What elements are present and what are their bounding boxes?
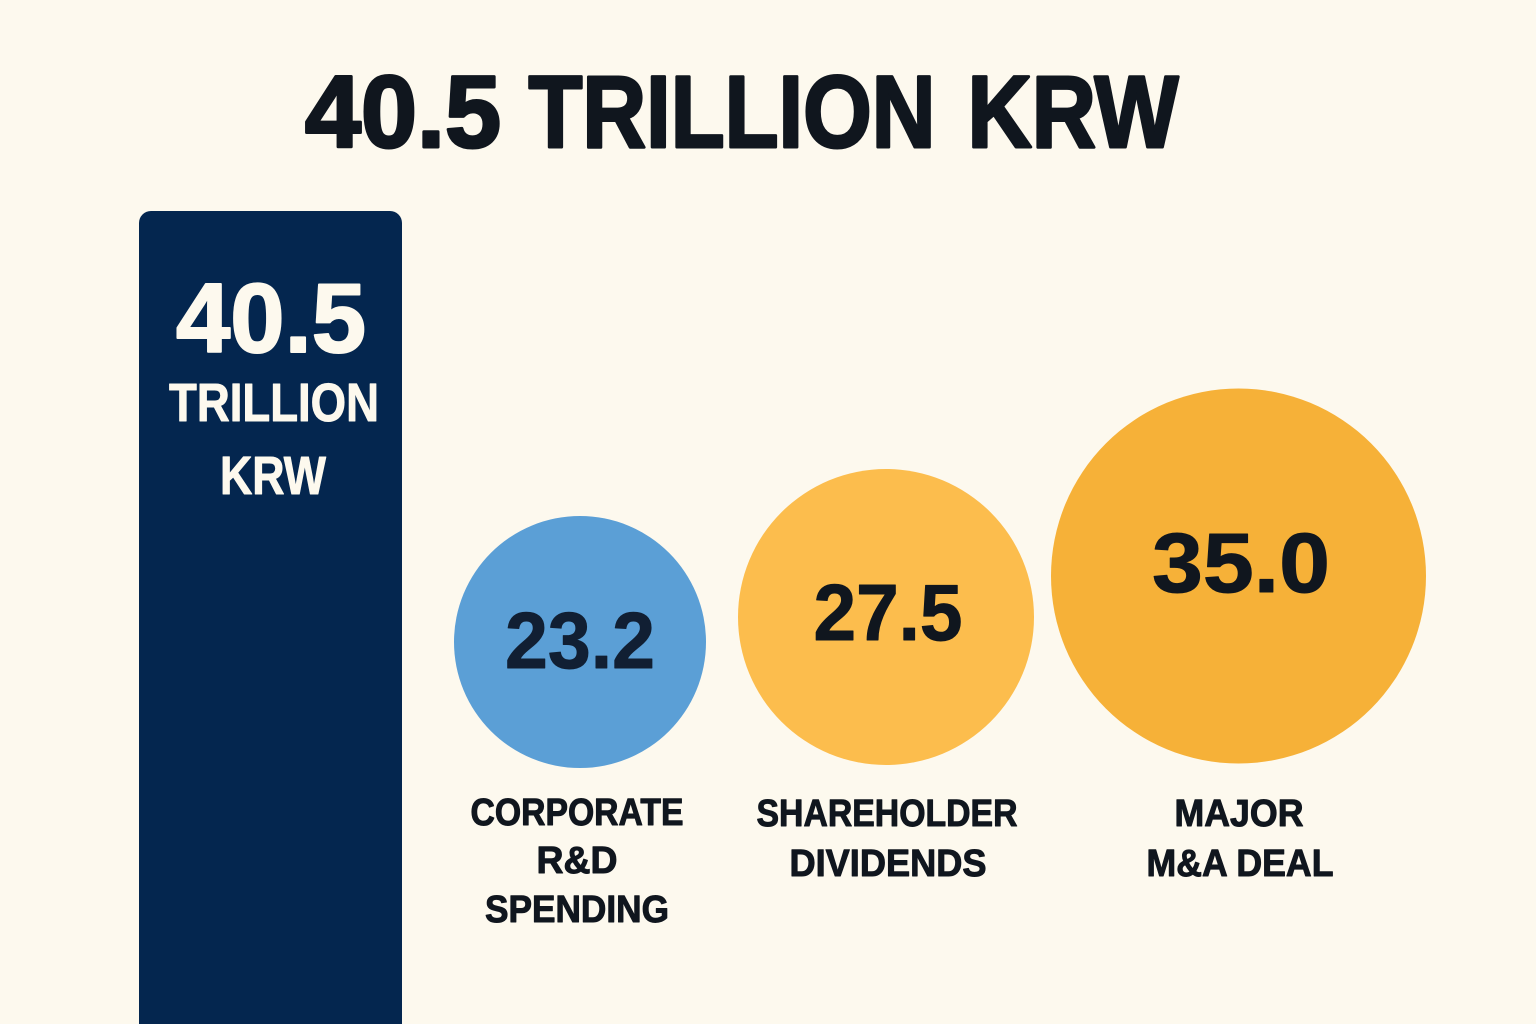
label: shareholder dividends: SHAREHOLDER	[756, 793, 1018, 835]
label: corporate R&D spending: CORPORATE	[470, 792, 684, 834]
label: major M&A deal	[1146, 793, 1334, 885]
bar unit line 1: TRILLION	[169, 373, 379, 433]
title	[305, 55, 1179, 169]
label: shareholder dividends: DIVIDENDS	[790, 843, 986, 885]
label: shareholder dividends	[756, 793, 1018, 885]
title: KRW	[968, 55, 1179, 169]
label: corporate R&D spending	[470, 792, 684, 931]
bar unit line 2: KRW	[220, 446, 326, 506]
label: major M&A deal: M&A DEAL	[1146, 843, 1334, 885]
label: corporate R&D spending: R&D	[536, 840, 618, 882]
bubble: shareholder dividends	[738, 469, 1034, 765]
bubble: major M&A deal: 35.0	[1152, 516, 1330, 610]
label: corporate R&D spending: SPENDING	[485, 889, 669, 931]
bubble: major M&A deal	[1051, 388, 1426, 764]
panel: total bar	[139, 211, 402, 1024]
title: 40.5	[305, 55, 501, 169]
label: major M&A deal: MAJOR	[1174, 793, 1304, 835]
bar value: 40.5	[176, 263, 366, 373]
bubble: corporate R&D: 23.2	[505, 596, 655, 685]
bubble: corporate R&D	[454, 516, 706, 768]
bubble: shareholder dividends: 27.5	[814, 568, 962, 657]
title: TRILLION	[528, 55, 936, 169]
